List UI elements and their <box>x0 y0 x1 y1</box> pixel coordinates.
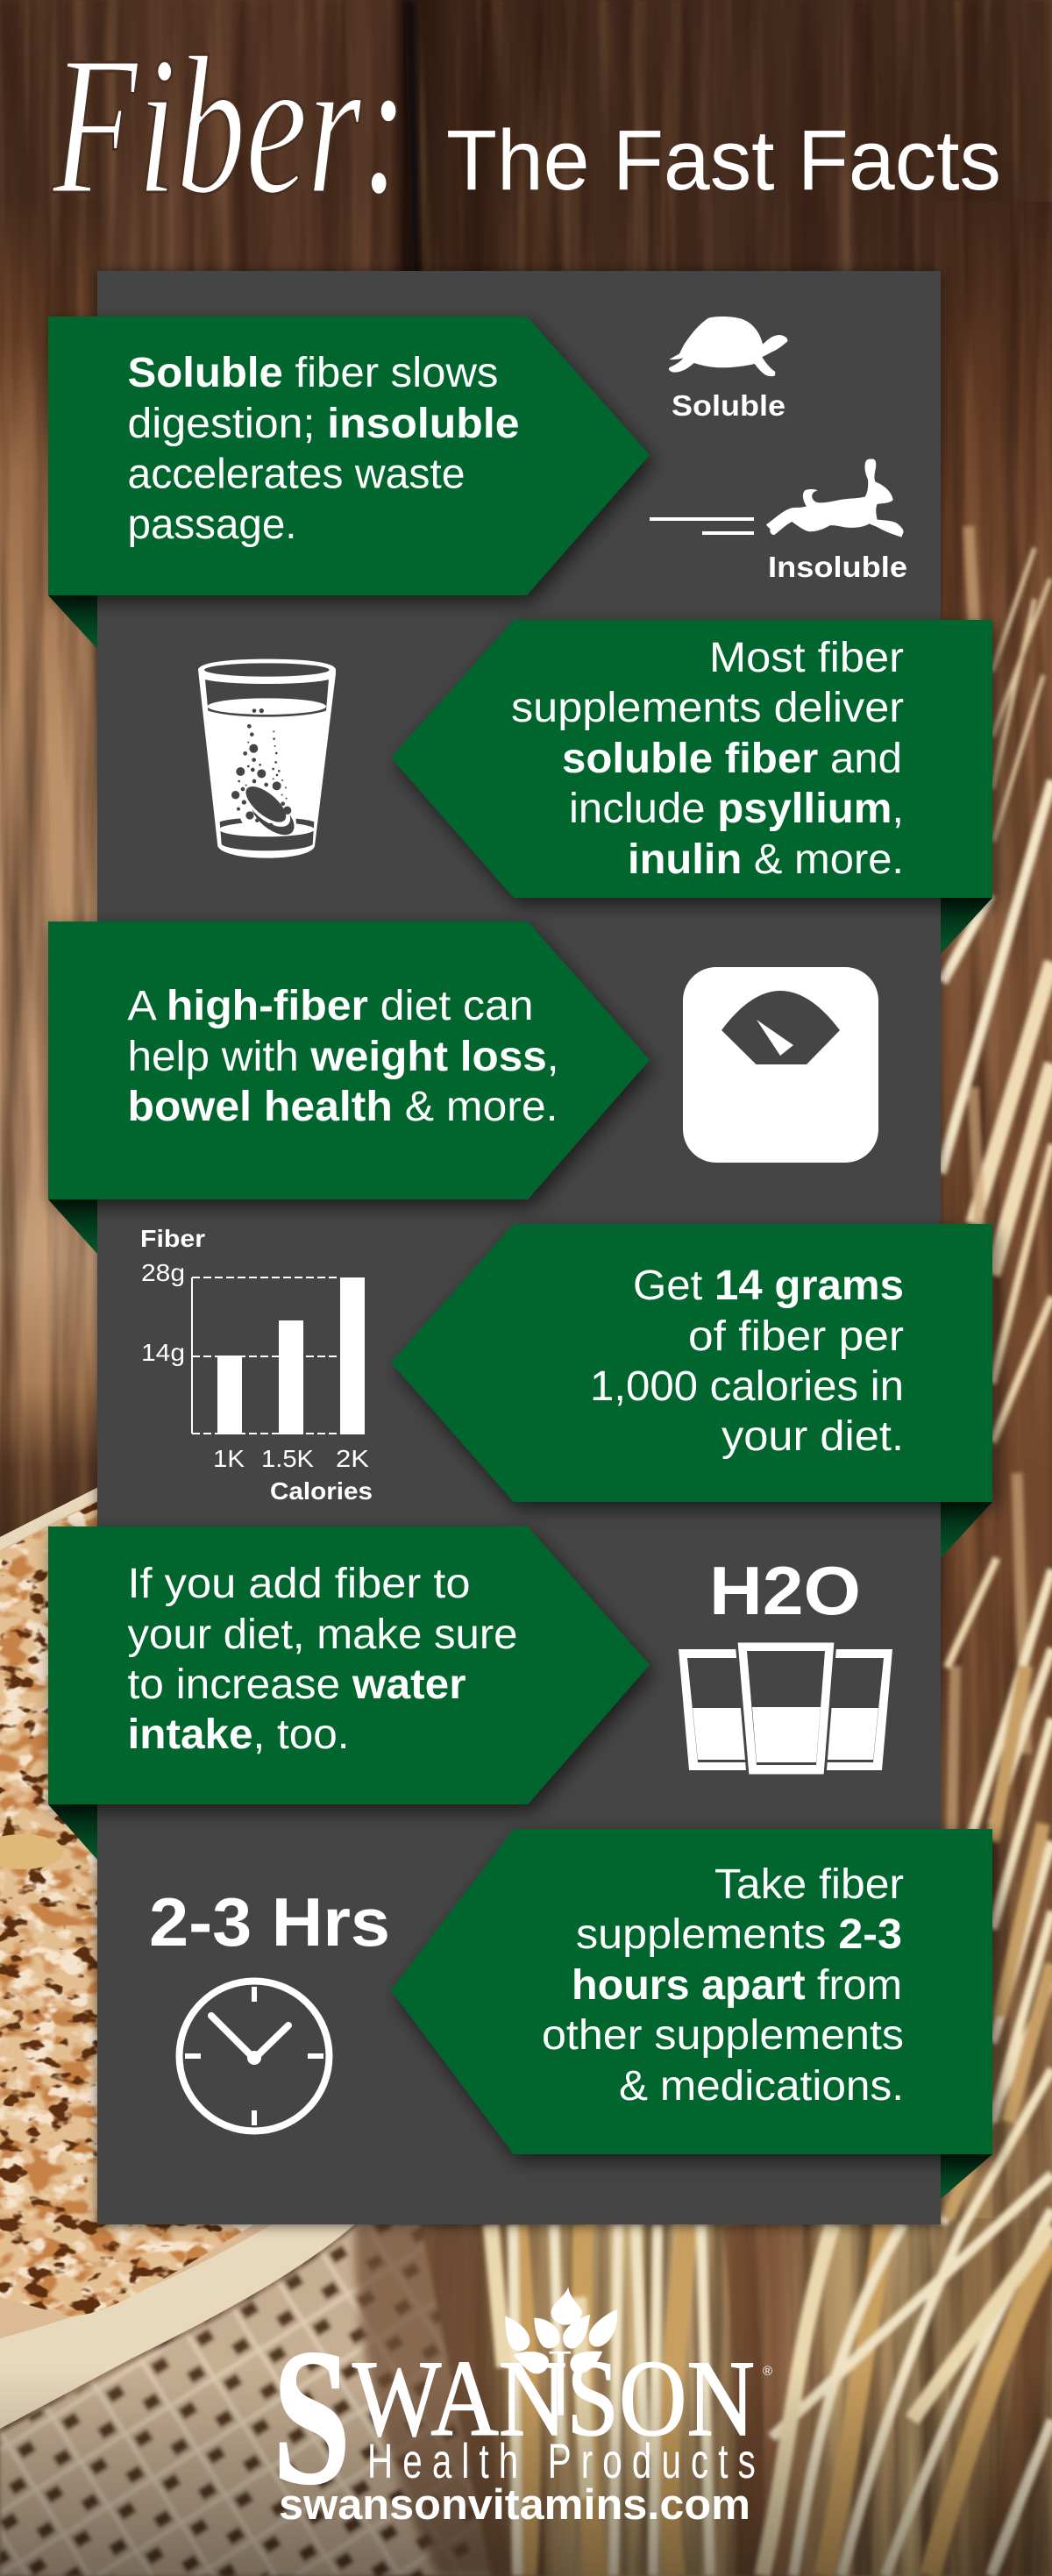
logo: registered mark: ® <box>763 2364 772 2379</box>
banner 5: water intake <box>48 1526 650 1860</box>
wheat stalks <box>491 526 1052 2576</box>
banner 5: water intake: to increase water <box>128 1662 466 1708</box>
right strip straws <box>992 548 1050 842</box>
banner 6: timing <box>391 1829 992 2199</box>
banner 6: timing: hours apart from <box>572 1962 902 2009</box>
title: Fiber: Fiber: <box>52 16 408 235</box>
icon: fizzing tablet in glass <box>198 659 336 858</box>
banner 1: soluble vs insoluble <box>48 317 650 649</box>
chart: fiber grams per calories <box>140 1225 373 1505</box>
banner 2: supplements: soluble fiber and <box>562 736 902 782</box>
chart x-axis labels: 1K <box>213 1445 245 1472</box>
label: Soluble: Soluble <box>672 389 785 422</box>
banner 5: water intake: intake, too. <box>128 1711 349 1758</box>
icon: clock with 2-3 Hrs heading <box>149 1883 390 2131</box>
chart y-axis labels <box>141 1259 185 1366</box>
logo: wheat emblem <box>505 2287 617 2416</box>
chart axis and gridlines <box>192 1277 340 1434</box>
chart x-axis title: Calories <box>270 1477 373 1505</box>
bottom vignette <box>0 2367 1052 2576</box>
banner 2: supplements: Most fiber <box>709 635 904 681</box>
logo: website: swansonvitamins.com <box>279 2480 750 2529</box>
banner 1: soluble vs insoluble: passage. <box>128 502 296 548</box>
banner 2: supplements: supplements deliver <box>511 685 904 731</box>
label: Insoluble: Insoluble <box>768 551 907 583</box>
banner 4: 14 grams: your diet. <box>721 1413 904 1460</box>
icon: centre glass <box>736 1641 835 1775</box>
chart bars <box>217 1277 365 1434</box>
banner 2: supplements <box>391 620 992 954</box>
icon: clock <box>179 1982 330 2131</box>
logo: WANSON: WANSON <box>352 2338 755 2459</box>
banner 6: timing: other supplements <box>542 2012 904 2059</box>
banner 4: 14 grams <box>391 1224 992 1558</box>
banner 2: supplements: include psyllium, <box>569 786 904 832</box>
title <box>52 16 1001 235</box>
speed lines <box>650 517 754 535</box>
chart x-axis labels <box>213 1445 369 1472</box>
banner 2: supplements: inulin & more. <box>628 836 904 883</box>
icon: turtle and rabbit comparison <box>650 317 907 583</box>
panel: dark grey background <box>97 271 941 2224</box>
icon: rabbit <box>766 459 904 537</box>
logo: initial S: S <box>273 2309 351 2525</box>
banner 1: soluble vs insoluble: accelerates waste <box>128 451 465 498</box>
heading: H2O: H2O <box>709 1552 861 1629</box>
icon: turtle <box>669 317 787 376</box>
banner 6: timing: & medications. <box>619 2063 904 2110</box>
burlap <box>0 2224 491 2576</box>
banner 4: 14 grams: 1,000 calories in <box>590 1363 904 1410</box>
banner 1: soluble vs insoluble: digestion; insoluble <box>128 401 519 447</box>
chart y-axis labels: 14g <box>141 1339 185 1366</box>
icon: H2O water glasses <box>679 1552 892 1775</box>
banner 3: high-fiber diet: help with weight loss, <box>128 1034 559 1080</box>
logo: Health Products: Health Products <box>367 2435 756 2489</box>
icon: bathroom scale <box>683 967 878 1163</box>
banner 5: water intake: If you add fiber to <box>128 1561 470 1607</box>
title: The Fast Facts: The Fast Facts <box>446 112 1001 208</box>
banner 3: high-fiber diet <box>48 922 650 1254</box>
logo: Swanson Health Products <box>273 2287 772 2529</box>
banner 4: 14 grams: of fiber per <box>688 1313 904 1360</box>
heading: 2-3 Hrs: 2-3 Hrs <box>149 1883 390 1960</box>
banner 6: timing: Take fiber <box>714 1861 904 1908</box>
chart x-axis labels: 1.5K <box>261 1445 314 1472</box>
bowl rim <box>0 1484 456 2429</box>
bowl inner <box>0 1496 438 2338</box>
banner 5: water intake: your diet, make sure <box>128 1612 517 1658</box>
icon: right glass <box>817 1649 892 1770</box>
banner 1: soluble vs insoluble: Soluble fiber slows <box>128 350 498 396</box>
oats <box>0 1501 254 2316</box>
chart y-axis labels: 28g <box>141 1259 185 1286</box>
banner 3: high-fiber diet: A high-fiber diet can <box>128 983 533 1029</box>
banner 4: 14 grams: Get 14 grams <box>633 1263 904 1309</box>
chart x-axis labels: 2K <box>336 1445 369 1472</box>
chart y-axis title: Fiber <box>140 1225 205 1252</box>
banner 3: high-fiber diet: bowel health & more. <box>128 1084 558 1130</box>
banner 6: timing: supplements 2-3 <box>576 1911 902 1958</box>
icon: left glass <box>679 1649 754 1770</box>
